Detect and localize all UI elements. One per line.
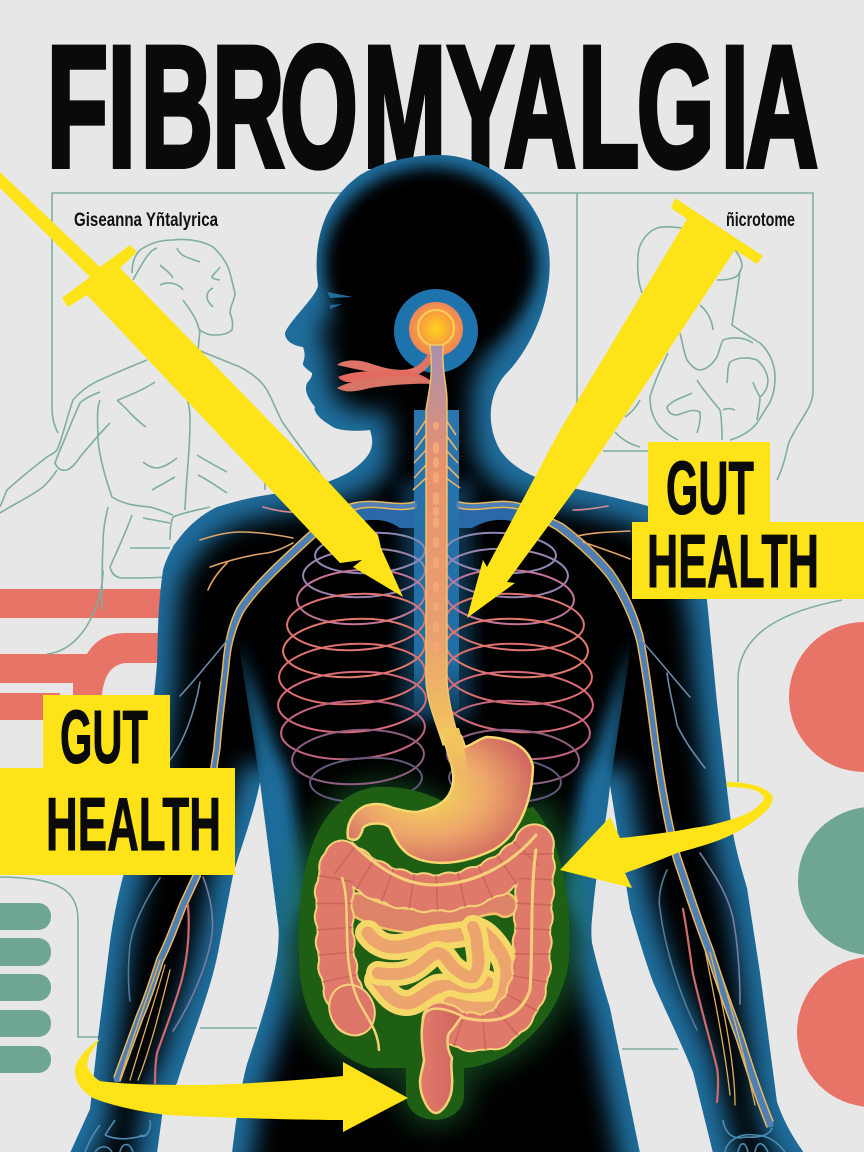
esophagus join xyxy=(441,728,468,775)
small label right: ñicrotome xyxy=(726,210,795,231)
callout: gut health right xyxy=(632,442,864,603)
spine xyxy=(413,345,460,745)
rib cage xyxy=(277,530,594,805)
green gut blob xyxy=(299,787,570,1120)
stomach xyxy=(348,735,533,863)
callout: gut health right: GUT xyxy=(666,446,754,530)
illustration: anatomy sketch left xyxy=(0,239,320,610)
clavicle shading xyxy=(355,508,518,528)
body silhouette xyxy=(70,155,804,1152)
vertebrae xyxy=(413,420,460,490)
small label left: Giseanna Yñtalyrica xyxy=(74,210,218,231)
nerves: right shoulder and arm xyxy=(459,501,773,1127)
halo: brain xyxy=(394,289,478,373)
panel: left pink pipes xyxy=(0,589,165,720)
panel: outline frames xyxy=(0,193,842,1049)
small intestine xyxy=(358,902,507,1008)
nerves: left shoulder and arm xyxy=(114,501,414,1083)
green glow xyxy=(288,780,581,1126)
callout: gut health left xyxy=(0,695,235,875)
blue spine band xyxy=(414,410,459,725)
rectum xyxy=(420,1009,462,1113)
illustration: anatomy sketch right xyxy=(615,227,775,447)
armpit crease shading xyxy=(236,640,308,940)
arrow: curved right xyxy=(560,782,773,888)
colon xyxy=(321,835,536,1050)
callout: gut health left: HEALTH xyxy=(46,782,221,866)
hand bones xyxy=(85,1120,785,1152)
arrow: curved bottom left xyxy=(75,1039,408,1132)
blue spine glow xyxy=(400,480,474,720)
callout: gut health left: GUT xyxy=(60,695,148,779)
arrow: yellow syringe right xyxy=(467,198,763,618)
panel: left green pills xyxy=(0,903,51,1073)
tubes: mouth and throat xyxy=(337,354,440,391)
head darkening xyxy=(326,170,534,354)
arrow: yellow syringe left xyxy=(0,172,403,597)
title: FIBROMYALGIA xyxy=(47,11,818,203)
blue face details xyxy=(327,292,353,309)
panel: right colored circles xyxy=(789,622,864,1107)
